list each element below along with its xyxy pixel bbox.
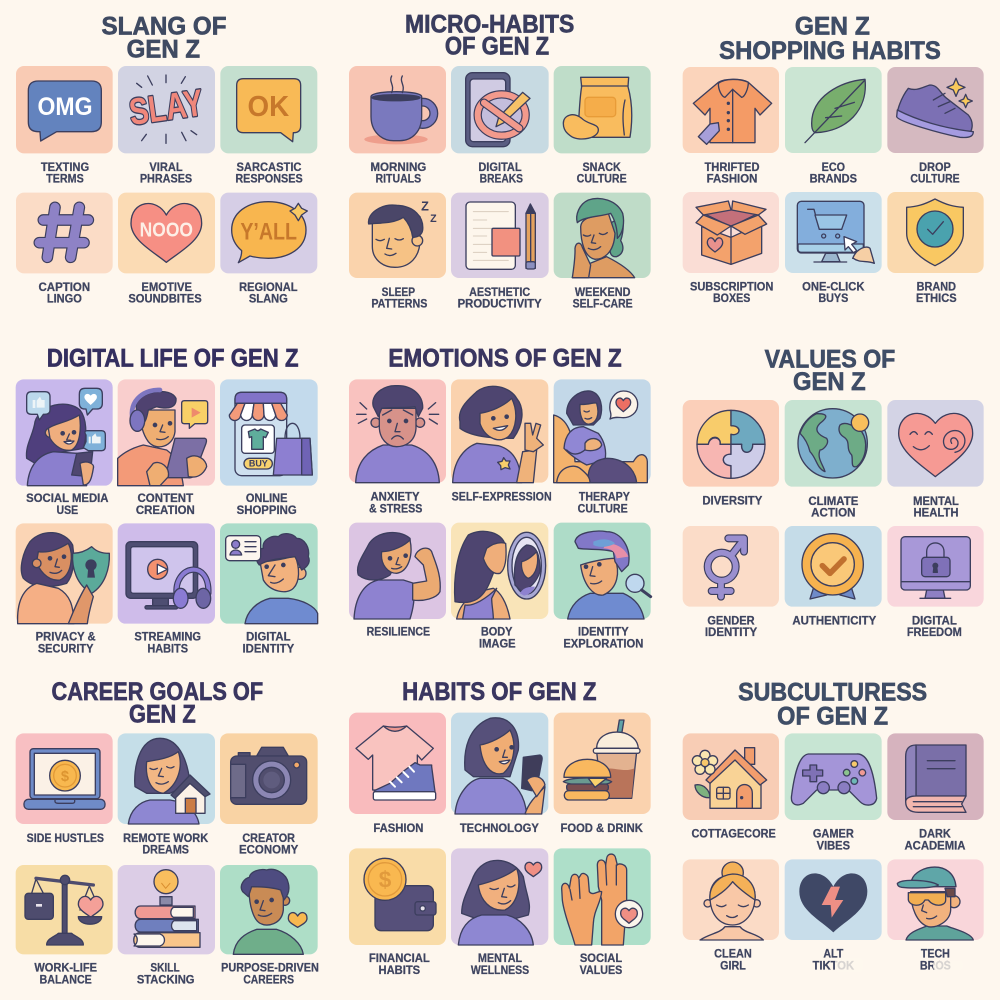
label bbox=[812, 947, 854, 972]
icon: woman with towel bbox=[572, 199, 635, 278]
label: PATTERNS bbox=[371, 297, 427, 311]
icon: worried face bbox=[356, 386, 439, 483]
panel: micro-habits of Gen Z bbox=[349, 12, 651, 311]
label bbox=[36, 629, 96, 655]
label bbox=[705, 613, 758, 639]
label: SOCIAL bbox=[580, 951, 623, 965]
tile: brand ethics bbox=[887, 192, 984, 305]
label: FINANCIAL bbox=[369, 951, 430, 965]
label: PRIVACY & bbox=[36, 629, 96, 643]
label: BOXES bbox=[713, 291, 750, 305]
label bbox=[471, 951, 529, 977]
label: SHOPPING bbox=[237, 503, 297, 517]
label bbox=[479, 625, 516, 651]
label: WELLNESS bbox=[471, 963, 529, 977]
tile: tech bros bbox=[887, 859, 984, 972]
label: ACTION bbox=[811, 506, 856, 520]
title: micro-habits: OF GEN Z bbox=[445, 34, 549, 61]
label: BUYS bbox=[818, 291, 848, 305]
watermark patch over bottom labels bbox=[835, 958, 963, 972]
label bbox=[41, 160, 89, 186]
label bbox=[810, 160, 857, 186]
tile: climate action bbox=[785, 400, 882, 520]
tile: gamer vibes bbox=[785, 733, 882, 852]
tile: subscription boxes bbox=[683, 192, 779, 305]
tile: side hustles bbox=[16, 733, 113, 845]
tile: weekend self-care bbox=[554, 193, 651, 311]
label bbox=[235, 160, 303, 186]
label: WORK-LIFE bbox=[34, 961, 97, 975]
tile: eco brands bbox=[785, 67, 882, 186]
icon: balance scale bbox=[25, 875, 103, 945]
label bbox=[690, 279, 773, 305]
icon: earth and sun bbox=[798, 409, 869, 478]
label bbox=[920, 947, 951, 972]
icon: girl with shield bbox=[18, 533, 109, 624]
label: ALT bbox=[823, 947, 844, 961]
title: values: VALUES OF bbox=[765, 346, 895, 373]
label bbox=[808, 494, 858, 520]
label bbox=[573, 285, 633, 311]
label: BRAND bbox=[917, 279, 956, 293]
icon: dark heart with bolt bbox=[799, 873, 867, 932]
label: BROS bbox=[920, 958, 951, 972]
tile: caption lingo bbox=[16, 193, 113, 306]
panel: digital life of Gen Z bbox=[16, 346, 318, 655]
panel: subcultures of Gen Z bbox=[683, 680, 984, 972]
label: VALUES bbox=[580, 963, 622, 977]
tile: drop culture bbox=[887, 67, 984, 186]
tile: snack culture bbox=[554, 66, 651, 186]
label bbox=[913, 494, 959, 520]
label: RITUALS bbox=[375, 172, 421, 186]
label: THERAPY bbox=[579, 490, 630, 504]
tile: resilience bbox=[349, 523, 446, 639]
title: micro-habits: MICRO-HABITS bbox=[405, 12, 574, 39]
icon: smiling heart with spiral bbox=[899, 413, 973, 477]
label bbox=[577, 160, 627, 186]
tile: fashion bbox=[349, 713, 446, 835]
tile: streaming habits bbox=[118, 523, 215, 655]
icon: sleeping face: Z bbox=[421, 200, 429, 214]
icon: laptop with coin: $ bbox=[61, 769, 69, 785]
icon: monitor and headphones bbox=[126, 542, 211, 609]
icon: sleeping face: Z bbox=[430, 213, 437, 225]
label: DIGITAL bbox=[478, 160, 522, 174]
label: SELF-CARE bbox=[573, 297, 633, 311]
label: CREATOR bbox=[242, 831, 295, 845]
title: career goals bbox=[51, 679, 263, 728]
label bbox=[813, 827, 854, 852]
label: GAMER bbox=[813, 827, 854, 841]
label: RESILIENCE bbox=[367, 625, 430, 639]
label: HABITS bbox=[378, 963, 420, 977]
tile: purpose-driven careers bbox=[220, 865, 319, 987]
label: TECHNOLOGY bbox=[460, 821, 540, 835]
label: ACADEMIA bbox=[904, 838, 966, 852]
icon: puzzle globe bbox=[697, 410, 765, 478]
label: SECURITY bbox=[38, 641, 94, 655]
label: THRIFTED bbox=[704, 160, 760, 174]
label: CAPTION bbox=[38, 280, 90, 294]
label bbox=[578, 490, 630, 516]
label: PRODUCTIVITY bbox=[458, 297, 542, 311]
label bbox=[137, 961, 194, 987]
label bbox=[580, 951, 623, 977]
label bbox=[907, 613, 962, 639]
label: BREAKS bbox=[480, 172, 523, 186]
label: ANXIETY bbox=[370, 490, 420, 504]
icon: wallet and coin: $ bbox=[379, 866, 392, 892]
tile: privacy and security bbox=[16, 523, 113, 655]
icon: snack bag and chip bbox=[563, 77, 632, 139]
title: subculturess bbox=[738, 680, 927, 730]
label bbox=[563, 625, 643, 651]
label bbox=[371, 285, 427, 311]
icon: open box with heart bbox=[696, 201, 767, 264]
title: slang bbox=[101, 13, 226, 64]
tile: texting terms bbox=[16, 66, 113, 186]
icon: OK bubble: OK bbox=[247, 91, 290, 123]
label bbox=[910, 160, 960, 186]
tile: therapy culture bbox=[554, 379, 651, 516]
icon: notebook and pencil bbox=[466, 202, 535, 269]
icon: cottage and flower bbox=[692, 748, 767, 808]
label: SARCASTIC bbox=[236, 160, 302, 174]
label: LINGO bbox=[47, 292, 82, 306]
icon: game controller bbox=[791, 754, 877, 805]
tile: body image bbox=[451, 523, 548, 651]
label: CONTENT bbox=[137, 491, 194, 505]
icon: shop app and bag: BUY bbox=[249, 459, 268, 469]
label: SUBSCRIPTION bbox=[690, 279, 773, 293]
tile: thrifted fashion bbox=[683, 67, 779, 186]
icon: leaf bbox=[805, 79, 865, 143]
label: BALANCE bbox=[39, 973, 92, 987]
label bbox=[802, 279, 865, 305]
label bbox=[458, 285, 542, 311]
label bbox=[221, 961, 319, 987]
label bbox=[140, 160, 192, 186]
label: FASHION bbox=[373, 821, 423, 835]
label: COTTAGECORE bbox=[691, 827, 776, 841]
icon: shirt with tag bbox=[693, 79, 772, 144]
label: SOUNDBITES bbox=[128, 292, 202, 306]
title: values: GEN Z bbox=[793, 369, 866, 396]
label: IDENTITY bbox=[705, 625, 758, 639]
label bbox=[370, 160, 426, 186]
label: CULTURE bbox=[578, 502, 628, 516]
label: FOOD & DRINK bbox=[560, 821, 643, 835]
label: REMOTE WORK bbox=[123, 831, 208, 845]
icon: burger and iced drink bbox=[563, 720, 640, 800]
icon: girl with smartphone bbox=[455, 718, 545, 814]
panel: emotions of Gen Z bbox=[349, 346, 651, 651]
label: EMOTIVE bbox=[141, 280, 192, 294]
label: SIDE HUSTLES bbox=[27, 831, 104, 845]
icon: girl with bun bbox=[700, 862, 763, 940]
label: RESPONSES bbox=[235, 172, 303, 186]
tile: technology bbox=[451, 713, 548, 835]
label: CREATION bbox=[136, 503, 195, 517]
label: TIKTOK bbox=[812, 958, 854, 972]
panel: values of Gen Z bbox=[683, 346, 984, 639]
icon: books and light bulb bbox=[134, 870, 200, 947]
label: ECONOMY bbox=[239, 843, 299, 857]
tile: authenticity bbox=[785, 526, 882, 627]
label: TEXTING bbox=[41, 160, 89, 174]
tile: social values bbox=[554, 848, 651, 977]
label: ECO bbox=[822, 160, 845, 174]
icon: colorful hair and magnifier bbox=[568, 531, 651, 619]
label bbox=[26, 491, 109, 517]
label: DIGITAL bbox=[246, 629, 291, 643]
tile: sarcastic responses bbox=[220, 66, 317, 186]
icon: sneaker and sparkles bbox=[897, 78, 973, 138]
tile: gender identity bbox=[683, 526, 779, 639]
label: CULTURE bbox=[910, 172, 960, 186]
label: DIVERSITY bbox=[702, 493, 763, 507]
label: USE bbox=[56, 503, 78, 517]
label: CLEAN bbox=[714, 947, 752, 961]
icon: monitor with lock bbox=[901, 537, 970, 598]
tile: remote work dreams bbox=[118, 733, 215, 857]
label: & STRESS bbox=[369, 502, 422, 516]
title: shopping habits bbox=[719, 13, 941, 65]
icon: calm girl with heart bbox=[458, 860, 542, 945]
icon: raised hands and heart bbox=[562, 854, 643, 945]
label: ETHICS bbox=[916, 291, 957, 305]
label bbox=[134, 629, 201, 655]
tile: creator economy bbox=[220, 733, 318, 857]
label: GIRL bbox=[720, 958, 746, 972]
label: AESTHETIC bbox=[469, 285, 530, 299]
label bbox=[714, 947, 752, 972]
label: IDENTITY bbox=[242, 641, 295, 655]
icon: gender symbol bbox=[708, 538, 744, 597]
label: DARK bbox=[919, 827, 951, 841]
label: SLANG bbox=[249, 292, 288, 306]
tile: morning rituals bbox=[349, 66, 446, 186]
label bbox=[38, 280, 90, 306]
icon: smiling girl with peace sign bbox=[453, 386, 543, 483]
label: MORNING bbox=[370, 160, 426, 174]
label: HEALTH bbox=[913, 506, 959, 520]
label: DROP bbox=[919, 160, 951, 174]
tile: content creation bbox=[118, 379, 215, 517]
tile: identity exploration bbox=[554, 523, 651, 651]
icon: NOOO heart: NOOO bbox=[140, 219, 193, 242]
icon: closed book bbox=[906, 745, 966, 812]
title: emotions: EMOTIONS OF GEN Z bbox=[388, 346, 622, 373]
label: CLIMATE bbox=[808, 494, 858, 508]
label: PHRASES bbox=[140, 172, 192, 186]
icon: young man with heart bbox=[233, 869, 307, 954]
label: ONE-CLICK bbox=[802, 279, 865, 293]
title: values bbox=[765, 346, 895, 396]
label: SKILL bbox=[150, 961, 180, 975]
label bbox=[704, 160, 760, 186]
label: MENTAL bbox=[913, 494, 959, 508]
tile: clean girl bbox=[683, 859, 779, 972]
label: VIBES bbox=[817, 838, 850, 852]
label: TERMS bbox=[46, 172, 84, 186]
title: shopping habits: GEN Z bbox=[795, 13, 870, 40]
icon: camera bbox=[231, 747, 307, 804]
tile: self-expression bbox=[451, 379, 552, 504]
title: career goals: GEN Z bbox=[129, 701, 196, 728]
tile: digital freedom bbox=[887, 526, 984, 639]
label: EXPLORATION bbox=[563, 637, 643, 651]
panel: Gen Z shopping habits bbox=[683, 13, 984, 305]
icon: OMG bubble: OMG bbox=[37, 93, 92, 121]
panel: habits of Gen Z bbox=[349, 679, 651, 977]
icon: shield check bbox=[907, 199, 963, 266]
tile: work-life balance bbox=[16, 865, 113, 987]
label: SELF-EXPRESSION bbox=[452, 490, 552, 504]
tile: sleep patterns bbox=[349, 193, 446, 311]
icon: SLAY burst: SLAY bbox=[126, 81, 206, 133]
label: IMAGE bbox=[479, 637, 516, 651]
tile: mental health bbox=[887, 400, 984, 520]
icon: sleeping face bbox=[368, 200, 437, 267]
tile: anxiety and stress bbox=[349, 379, 446, 516]
icon: hashtag bbox=[39, 207, 88, 257]
label bbox=[128, 280, 202, 306]
tile: viral phrases bbox=[118, 66, 215, 186]
label bbox=[904, 827, 966, 852]
icon: guy with cap and shades bbox=[897, 867, 973, 940]
label: CULTURE bbox=[577, 172, 627, 186]
tile: financial habits bbox=[349, 848, 446, 977]
label: TECH bbox=[921, 947, 950, 961]
label: MENTAL bbox=[478, 951, 523, 965]
title: career goals: CAREER GOALS OF bbox=[51, 679, 263, 706]
label bbox=[242, 629, 295, 655]
tile: one-click buys bbox=[785, 192, 882, 305]
label bbox=[369, 951, 430, 977]
icon: coffee mug bbox=[364, 76, 438, 144]
label bbox=[136, 491, 195, 517]
label: PURPOSE-DRIVEN bbox=[221, 961, 319, 975]
icon: monitor with cart bbox=[797, 201, 874, 263]
tile: dark academia bbox=[887, 733, 984, 852]
label: BRANDS bbox=[810, 172, 857, 186]
label bbox=[239, 831, 299, 857]
tile: digital identity bbox=[220, 523, 318, 655]
tile: aesthetic productivity bbox=[451, 193, 549, 311]
panel: career goals of Gen Z bbox=[16, 679, 319, 987]
label: SLEEP bbox=[382, 285, 415, 299]
label: HABITS bbox=[147, 641, 188, 655]
label bbox=[369, 490, 422, 516]
label: STACKING bbox=[137, 973, 194, 987]
tile: online shopping bbox=[220, 379, 318, 517]
tile: cottagecore bbox=[683, 733, 779, 841]
tile: regional slang bbox=[220, 193, 317, 306]
title: digital life: DIGITAL LIFE OF GEN Z bbox=[47, 346, 298, 373]
label: CAREERS bbox=[243, 973, 294, 987]
tile: alt tiktok bbox=[785, 859, 882, 972]
label: VIRAL bbox=[149, 160, 183, 174]
icon: girl with phone and likes bbox=[26, 388, 105, 486]
icon: boy with ID card bbox=[226, 534, 318, 624]
label bbox=[237, 491, 297, 517]
label: FASHION bbox=[707, 172, 757, 186]
icon: phone with no-sign bbox=[466, 73, 530, 147]
title: subculturess: SUBCULTURESS bbox=[738, 680, 927, 707]
label: DREAMS bbox=[142, 843, 189, 857]
label bbox=[123, 831, 208, 857]
label: FREEDOM bbox=[907, 625, 962, 639]
icon: creator with headphones and tablet bbox=[118, 390, 208, 486]
icon: woman and house bbox=[128, 738, 210, 824]
label bbox=[916, 279, 957, 305]
label: ONLINE bbox=[246, 491, 287, 505]
title: slang: GEN Z bbox=[127, 37, 200, 64]
icon: Y'ALL bubble: Y’ALL bbox=[240, 218, 297, 245]
title: micro-habits bbox=[405, 12, 574, 61]
panel: slang of Gen Z bbox=[16, 13, 317, 306]
icon: girl at mirror bbox=[455, 531, 546, 619]
label: SOCIAL MEDIA bbox=[26, 491, 109, 505]
title: slang: SLANG OF bbox=[101, 13, 226, 40]
label: DIGITAL bbox=[912, 613, 957, 627]
label: GENDER bbox=[707, 613, 755, 627]
label bbox=[34, 961, 97, 987]
label: STREAMING bbox=[134, 629, 201, 643]
label bbox=[478, 160, 523, 186]
label: SNACK bbox=[582, 160, 621, 174]
label bbox=[239, 280, 298, 306]
label: AUTHENTICITY bbox=[792, 613, 877, 627]
tile: skill stacking bbox=[118, 865, 215, 987]
tile: emotive soundbites bbox=[118, 193, 215, 306]
icon: girl flexing bbox=[354, 533, 440, 619]
tile: social media use bbox=[16, 379, 113, 517]
title: shopping habits: SHOPPING HABITS bbox=[719, 38, 941, 65]
label: IDENTITY bbox=[578, 625, 629, 639]
label: BODY bbox=[481, 625, 513, 639]
tile: mental wellness bbox=[451, 848, 548, 977]
title: habits: HABITS OF GEN Z bbox=[402, 679, 596, 706]
label: REGIONAL bbox=[239, 280, 298, 294]
icon: tee and sneaker bbox=[356, 726, 436, 800]
label: WEEKEND bbox=[575, 285, 631, 299]
icon: check badge bbox=[802, 534, 863, 599]
icon: girl on armchair bbox=[554, 391, 647, 483]
tile: food and drink bbox=[554, 713, 651, 835]
title: subculturess: OF GEN Z bbox=[777, 703, 888, 730]
tile: digital breaks bbox=[451, 66, 549, 186]
tile: diversity bbox=[683, 400, 779, 507]
